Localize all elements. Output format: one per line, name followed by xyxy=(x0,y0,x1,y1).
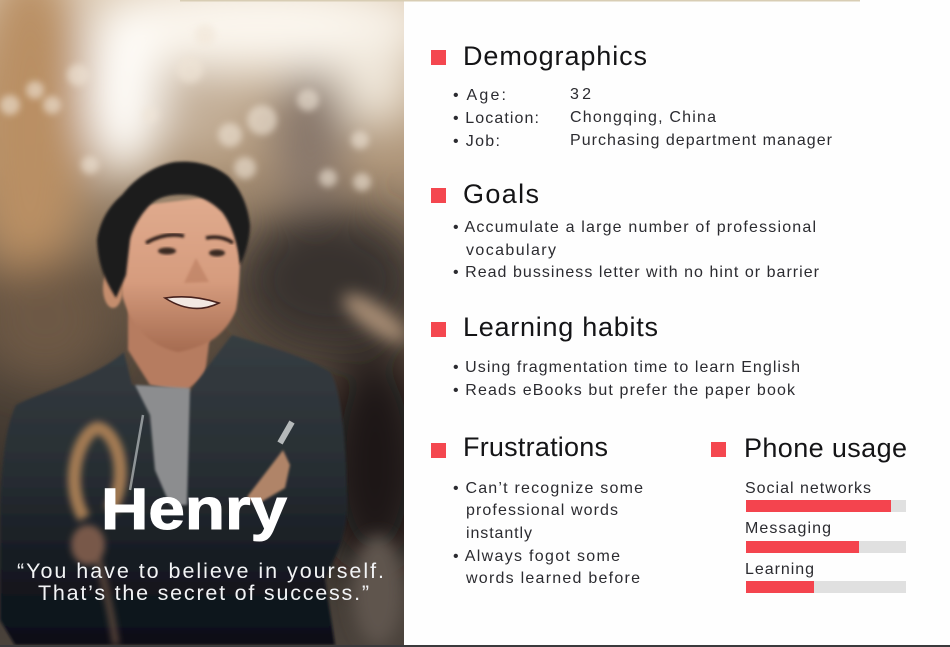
panel: demographics xyxy=(431,41,833,150)
panel: learning habits xyxy=(431,312,800,399)
heading: frustrations: Frustrations xyxy=(463,432,608,462)
ear xyxy=(103,268,123,308)
persona name: Henry xyxy=(101,477,287,542)
blurred background foliage xyxy=(0,0,430,645)
persona quote: That’s the secret of success.” xyxy=(38,581,369,605)
heading: learning habits: Learning habits xyxy=(463,312,658,342)
bar: social networks xyxy=(745,480,906,512)
goals list: vocabulary xyxy=(466,242,556,259)
demographics list: • Age: xyxy=(453,87,506,104)
demographics list: • Job: xyxy=(453,133,500,150)
panel: goals xyxy=(431,179,820,281)
t-shirt xyxy=(135,385,190,505)
learning habits list xyxy=(453,359,800,399)
goals list: • Accumulate a large number of professional xyxy=(453,219,816,236)
demographics list xyxy=(453,86,833,150)
bar: messaging: Messaging xyxy=(745,520,831,537)
neck xyxy=(126,308,211,390)
eyebrows and eyes xyxy=(146,235,233,243)
jacket zip xyxy=(130,415,143,490)
icon: section square xyxy=(431,443,446,458)
frustrations list: • Always fogot some xyxy=(453,548,620,565)
hand xyxy=(247,450,290,505)
panel: frustrations xyxy=(431,432,643,587)
jacket xyxy=(0,335,347,645)
top edge tint xyxy=(180,0,860,2)
goals list xyxy=(453,219,820,281)
frustrations list: professional words xyxy=(466,502,618,519)
persona quote: “You have to believe in yourself. xyxy=(17,559,384,583)
demographics list: • Location: xyxy=(453,110,539,127)
panel: portrait photo xyxy=(0,0,430,645)
face xyxy=(118,195,240,352)
bar: social networks: Social networks xyxy=(745,480,871,497)
bar: messaging xyxy=(745,520,906,553)
icon: section square xyxy=(431,322,446,337)
blurred foreground plant xyxy=(71,428,120,645)
icon: section square xyxy=(431,50,446,65)
goals list: • Read bussiness letter with no hint or barrier xyxy=(453,264,820,281)
heading: goals: Goals xyxy=(463,179,539,209)
frustrations list xyxy=(453,480,643,587)
icon: section square xyxy=(431,188,446,203)
frustrations list: instantly xyxy=(466,525,532,542)
frustrations list: words learned before xyxy=(465,570,640,587)
demographics list: Purchasing department manager xyxy=(570,132,833,149)
frustrations list: • Can’t recognize some xyxy=(453,480,643,497)
nose shadow xyxy=(185,260,208,283)
heading: demographics: Demographics xyxy=(463,41,647,71)
sleeve zip xyxy=(280,422,292,443)
panel: phone usage xyxy=(711,433,907,593)
bar: learning xyxy=(745,561,906,593)
learning habits list: • Reads eBooks but prefer the paper book xyxy=(453,382,796,399)
person xyxy=(0,162,347,645)
bar: learning: Learning xyxy=(745,561,814,578)
demographics list: 32 xyxy=(570,86,591,103)
persona quote xyxy=(18,562,382,600)
hair xyxy=(97,162,250,298)
icon: section square xyxy=(711,442,726,457)
smile xyxy=(165,297,219,308)
bottom edge of image xyxy=(0,645,950,647)
demographics list: Chongqing, China xyxy=(570,109,716,126)
learning habits list: • Using fragmentation time to learn English xyxy=(453,359,800,376)
heading: phone usage: Phone usage xyxy=(744,433,907,463)
